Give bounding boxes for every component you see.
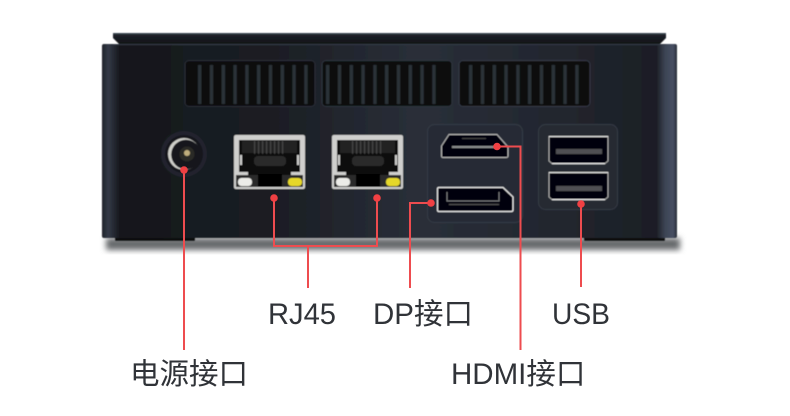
- label: RJ45: RJ45: [268, 298, 336, 331]
- chassis body: [102, 44, 677, 238]
- USB port 2: [549, 172, 608, 200]
- label: HDMI: HDMI接口: [451, 358, 585, 391]
- power jack: [161, 131, 207, 177]
- callout line: DP: [410, 199, 435, 288]
- mini PC device rear view: [102, 33, 680, 250]
- callout line: power: [180, 166, 188, 350]
- label: power: 电源接口: [130, 358, 248, 391]
- callout line: RJ45: [270, 194, 381, 288]
- vent: middle: [322, 60, 452, 106]
- USB port panel: [538, 124, 618, 210]
- DisplayPort port: [438, 188, 513, 212]
- video port panel: [428, 124, 522, 222]
- USB port 1: [549, 136, 608, 164]
- top lid: [113, 33, 666, 44]
- label: USB: USB: [552, 298, 610, 331]
- callout line: USB: [577, 200, 585, 287]
- vent: right: [459, 60, 590, 106]
- RJ45 port 1: [234, 135, 305, 189]
- feet: [115, 236, 665, 241]
- vent: left: [185, 60, 315, 106]
- callout line: HDMI: [493, 143, 520, 350]
- RJ45 port 2: [332, 135, 403, 189]
- HDMI port: [442, 134, 508, 158]
- label: DP: DP接口: [373, 298, 473, 331]
